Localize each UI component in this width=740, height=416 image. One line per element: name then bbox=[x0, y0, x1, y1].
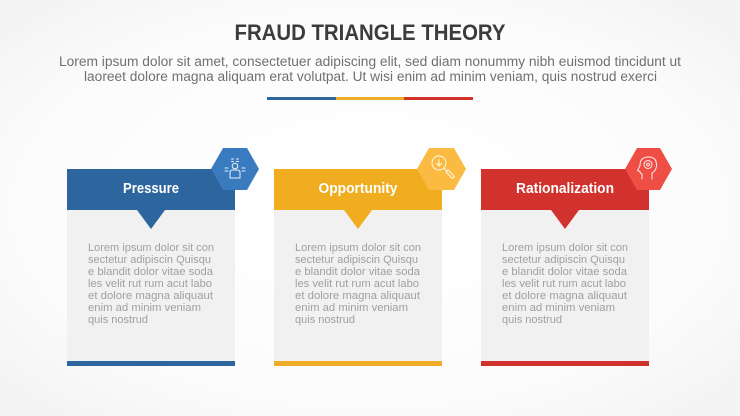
pressure body text: enim ad minim veniam bbox=[88, 302, 201, 314]
opportunity body text: enim ad minim veniam bbox=[295, 302, 408, 314]
subtitle text: laoreet dolore magna aliquam erat volutpat. Ut wisi enim ad minim veniam, quis nostrud exerci bbox=[84, 69, 657, 84]
opportunity bottom bar bbox=[274, 361, 442, 366]
tricolor divider bbox=[267, 97, 473, 100]
opportunity body text: e blandit dolor vitae soda bbox=[295, 266, 421, 278]
title: FRAUD TRIANGLE THEORY bbox=[234, 20, 506, 45]
panel: opportunity bbox=[274, 148, 466, 366]
pressure header bbox=[67, 169, 235, 229]
opportunity body text: sectetur adipiscin Quisqu bbox=[295, 254, 418, 266]
rationalization body text: sectetur adipiscin Quisqu bbox=[502, 254, 625, 266]
subtitle text bbox=[59, 54, 681, 84]
pressure card body bbox=[67, 205, 235, 362]
opportunity heading: Opportunity bbox=[318, 181, 398, 197]
panel: pressure bbox=[67, 148, 259, 366]
pressure body text: Lorem ipsum dolor sit con bbox=[88, 242, 214, 254]
rationalization header bbox=[481, 169, 649, 229]
opportunity body text: les velit rut rum acut labo bbox=[295, 278, 419, 290]
rationalization body text bbox=[502, 242, 628, 326]
rationalization card body bbox=[481, 205, 649, 362]
pressure body text bbox=[88, 242, 214, 326]
opportunity body text bbox=[295, 242, 421, 326]
pressure hexagon icon bbox=[211, 148, 259, 190]
opportunity body text: quis nostrud bbox=[295, 314, 355, 326]
opportunity header bbox=[274, 169, 442, 229]
pressure bottom bar bbox=[67, 361, 235, 366]
rationalization body text: Lorem ipsum dolor sit con bbox=[502, 242, 628, 254]
subtitle text: Lorem ipsum dolor sit amet, consectetuer adipiscing elit, sed diam nonummy nibh euismod tincidunt ut bbox=[59, 54, 681, 69]
pressure body text: e blandit dolor vitae soda bbox=[88, 266, 214, 278]
rationalization hexagon icon bbox=[625, 148, 672, 190]
rationalization bottom bar bbox=[481, 361, 649, 366]
pressure body text: sectetur adipiscin Quisqu bbox=[88, 254, 211, 266]
opportunity body text: et dolore magna aliquaut bbox=[295, 290, 421, 302]
pressure heading: Pressure bbox=[123, 181, 179, 197]
rationalization heading: Rationalization bbox=[516, 181, 614, 197]
pressure body text: et dolore magna aliquaut bbox=[88, 290, 214, 302]
rationalization body text: e blandit dolor vitae soda bbox=[502, 266, 628, 278]
opportunity hexagon icon bbox=[417, 148, 466, 190]
opportunity card body bbox=[274, 205, 442, 362]
rationalization body text: quis nostrud bbox=[502, 314, 562, 326]
rationalization body text: et dolore magna aliquaut bbox=[502, 290, 628, 302]
pressure body text: les velit rut rum acut labo bbox=[88, 278, 212, 290]
opportunity body text: Lorem ipsum dolor sit con bbox=[295, 242, 421, 254]
panel: rationalization bbox=[481, 148, 672, 366]
pressure body text: quis nostrud bbox=[88, 314, 148, 326]
rationalization body text: les velit rut rum acut labo bbox=[502, 278, 626, 290]
rationalization body text: enim ad minim veniam bbox=[502, 302, 615, 314]
